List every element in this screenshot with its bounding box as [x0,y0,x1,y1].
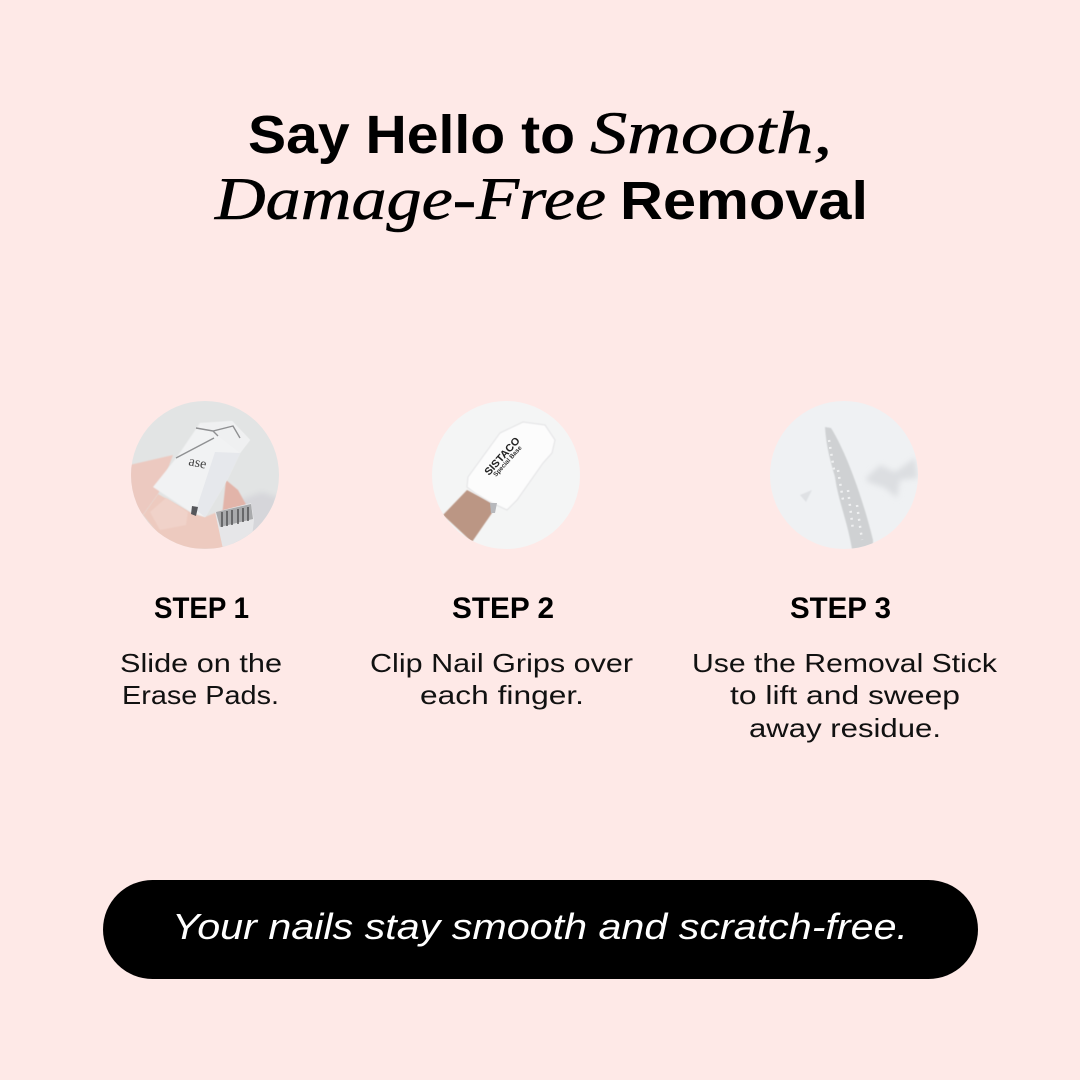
step 3 description [692,648,998,743]
icon: finger with nail grip photo [432,401,580,549]
callout pill [103,880,978,979]
step 1 column [120,401,282,710]
right finger [222,480,246,510]
step 3 description: Use the Removal Stick [692,648,998,678]
icon: removal stick on marble photo [770,401,918,549]
step 3 heading: STEP 3 [790,592,891,625]
step 2 heading: STEP 2 [452,592,554,625]
back finger [131,455,173,515]
step 1 description [120,648,282,710]
step 1 description: Erase Pads. [122,680,279,710]
step 2 description: each finger. [420,680,584,710]
front finger [143,494,225,549]
title: Damage-Free [214,166,606,232]
step 2 description [370,648,633,710]
step 3 column [692,401,998,743]
title: Smooth, [590,100,832,166]
step 3 description: away residue. [749,713,941,743]
title: Say Hello to [248,105,575,165]
icon: finger with nail grip photo: SISTACO [482,435,523,478]
callout pill: Your nails stay smooth and scratch-free. [172,906,908,947]
bottle [215,503,254,549]
step 2 description: Clip Nail Grips over [370,648,633,678]
step 1 heading: STEP 1 [154,592,249,625]
step 1 description: Slide on the [120,648,282,678]
icon: finger wrapped in erase pad photo: ase [187,454,208,473]
title: Removal [620,171,868,231]
step 3 description: to lift and sweep [730,680,960,710]
title [214,100,868,232]
infographic canvas [103,110,997,979]
wrap [153,422,240,518]
icon: finger wrapped in erase pad photo [125,401,279,549]
icon: finger with nail grip photo: Special Base [492,444,524,478]
step 2 column [370,401,633,710]
